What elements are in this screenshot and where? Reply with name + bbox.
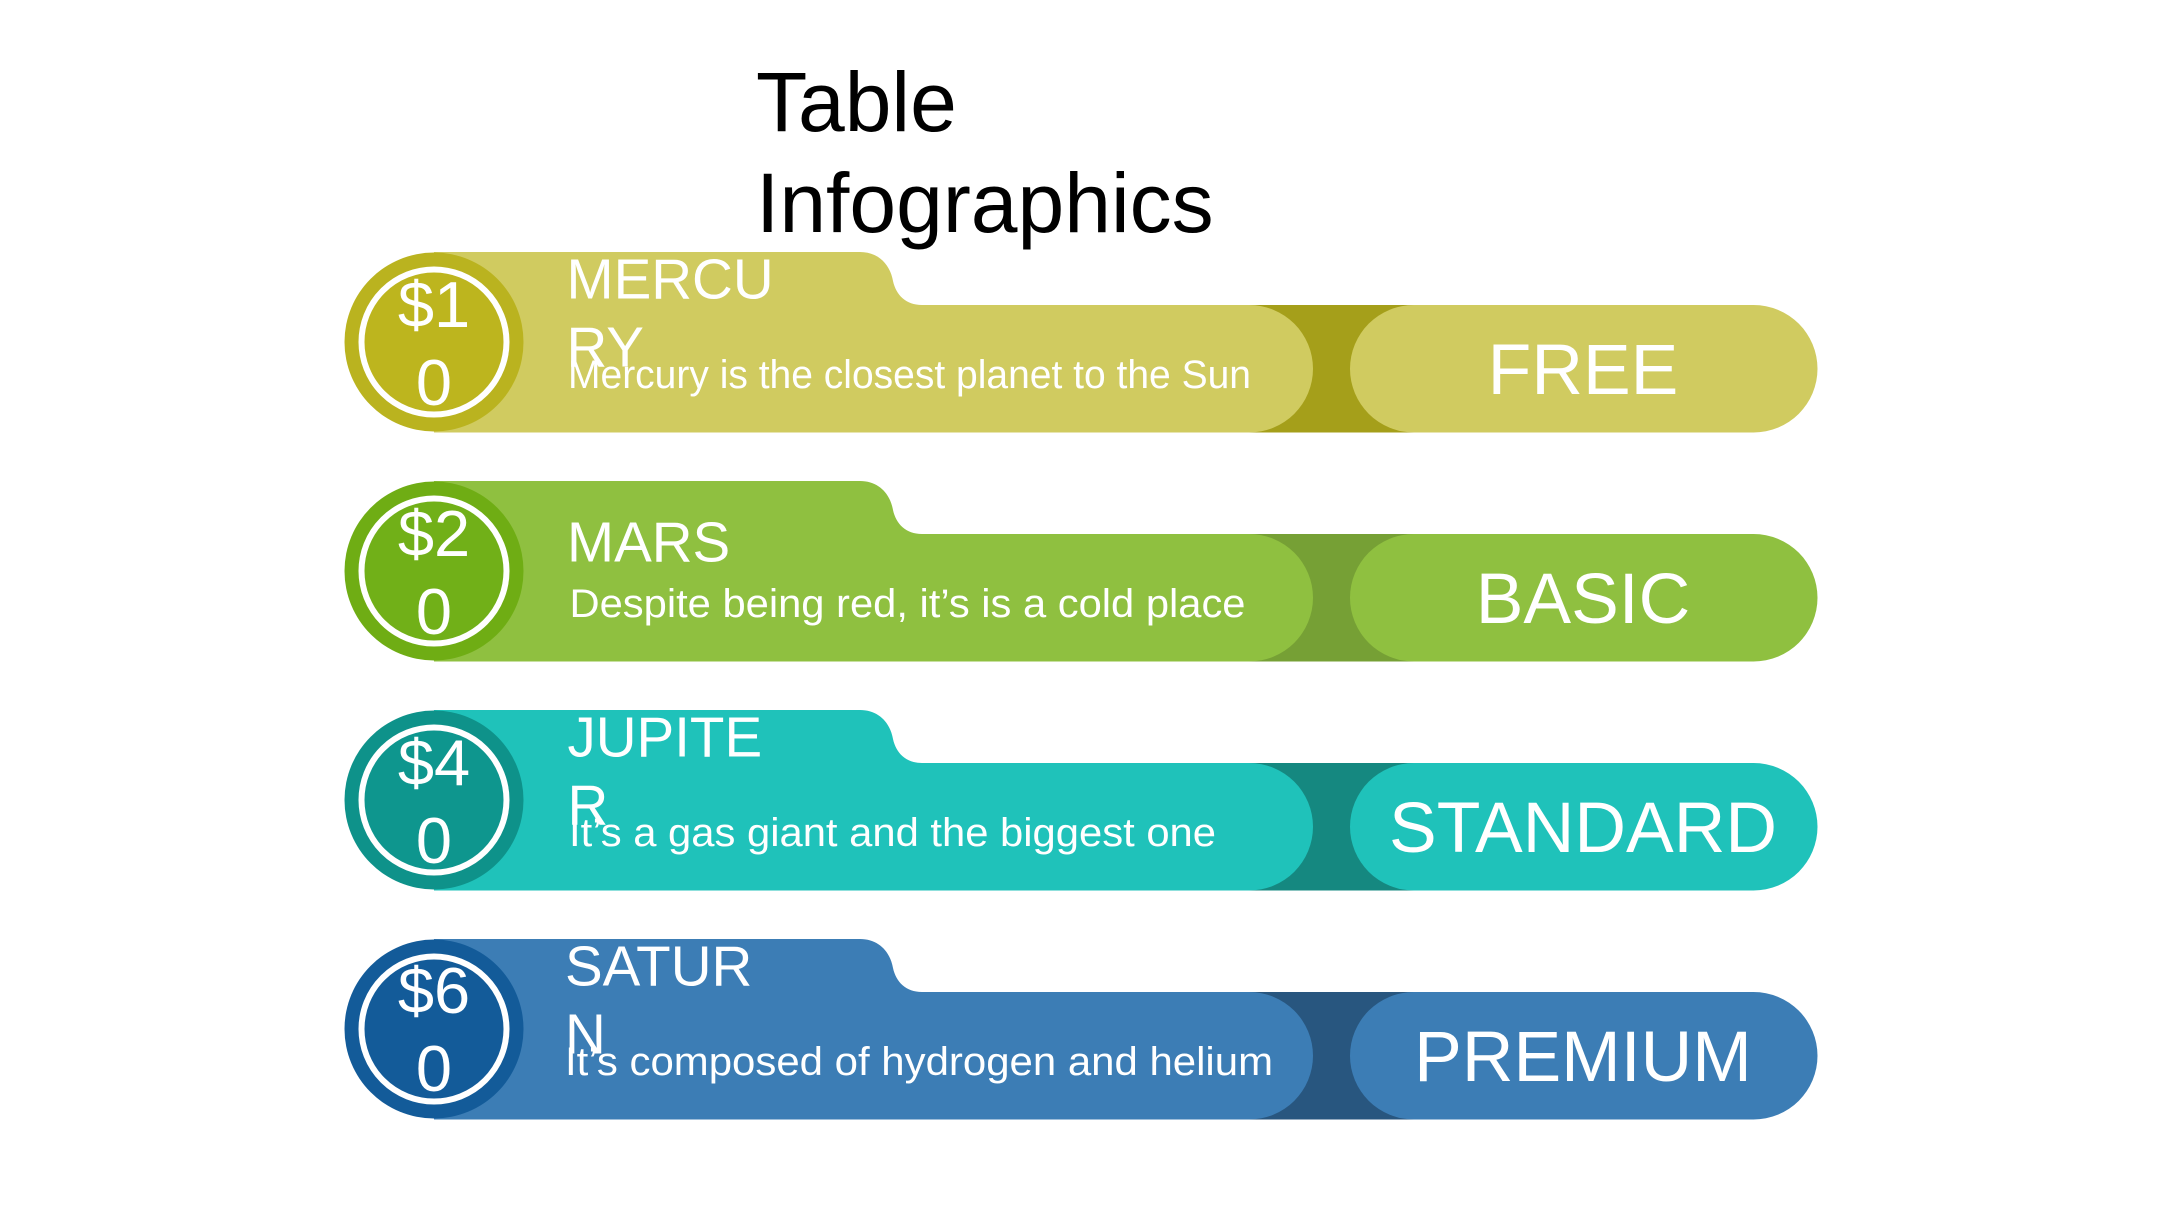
right pill xyxy=(1350,534,1818,662)
planet name: JUPITE xyxy=(568,706,762,768)
description: It’s composed of hydrogen and helium xyxy=(565,1040,1273,1084)
right pill xyxy=(1350,305,1818,432)
plan label: BASIC xyxy=(1476,559,1690,639)
price badge: 0 xyxy=(416,346,452,419)
price badge xyxy=(344,940,524,1118)
price badge xyxy=(344,482,524,660)
plan label: STANDARD xyxy=(1389,788,1777,868)
price badge: $6 xyxy=(398,954,470,1027)
right pill xyxy=(1350,763,1818,890)
row: Jupiter xyxy=(344,706,1818,890)
price badge: $1 xyxy=(398,268,470,341)
left bar with tab xyxy=(434,710,1313,890)
price badge xyxy=(344,252,524,432)
left bar with tab xyxy=(434,481,1313,662)
planet name: MARS xyxy=(567,510,730,574)
price badge: 0 xyxy=(416,575,452,648)
description: Mercury is the closest planet to the Sun xyxy=(568,353,1251,397)
price badge: $4 xyxy=(398,726,470,799)
dark connector band xyxy=(1224,763,1490,890)
price badge: 0 xyxy=(416,804,452,877)
row: Saturn xyxy=(344,934,1818,1120)
left bar with tab xyxy=(434,939,1313,1120)
dark connector band xyxy=(1224,305,1490,432)
title: Infographics xyxy=(756,156,1214,250)
planet name: N xyxy=(565,1002,606,1066)
planet name: R xyxy=(568,774,608,836)
dark connector band xyxy=(1224,992,1490,1120)
planet name: RY xyxy=(566,316,644,378)
description: Despite being red, it’s is a cold place xyxy=(570,582,1246,626)
title: Table xyxy=(756,55,957,149)
price badge: $2 xyxy=(398,497,470,570)
planet name xyxy=(565,934,752,1066)
planet name xyxy=(568,706,762,836)
dark connector band xyxy=(1224,534,1490,662)
plan label: FREE xyxy=(1488,330,1678,410)
description: It’s a gas giant and the biggest one xyxy=(569,811,1216,855)
planet name: MERCU xyxy=(566,248,774,310)
price badge: 0 xyxy=(416,1032,452,1105)
title xyxy=(756,55,1214,250)
right pill xyxy=(1350,992,1818,1120)
planet name xyxy=(566,248,774,378)
plan label: PREMIUM xyxy=(1414,1017,1752,1097)
row: Mars xyxy=(344,481,1818,662)
left bar with tab xyxy=(434,252,1313,432)
planet name: SATUR xyxy=(565,934,752,998)
row: Mercury xyxy=(344,248,1818,432)
price badge xyxy=(344,710,524,890)
